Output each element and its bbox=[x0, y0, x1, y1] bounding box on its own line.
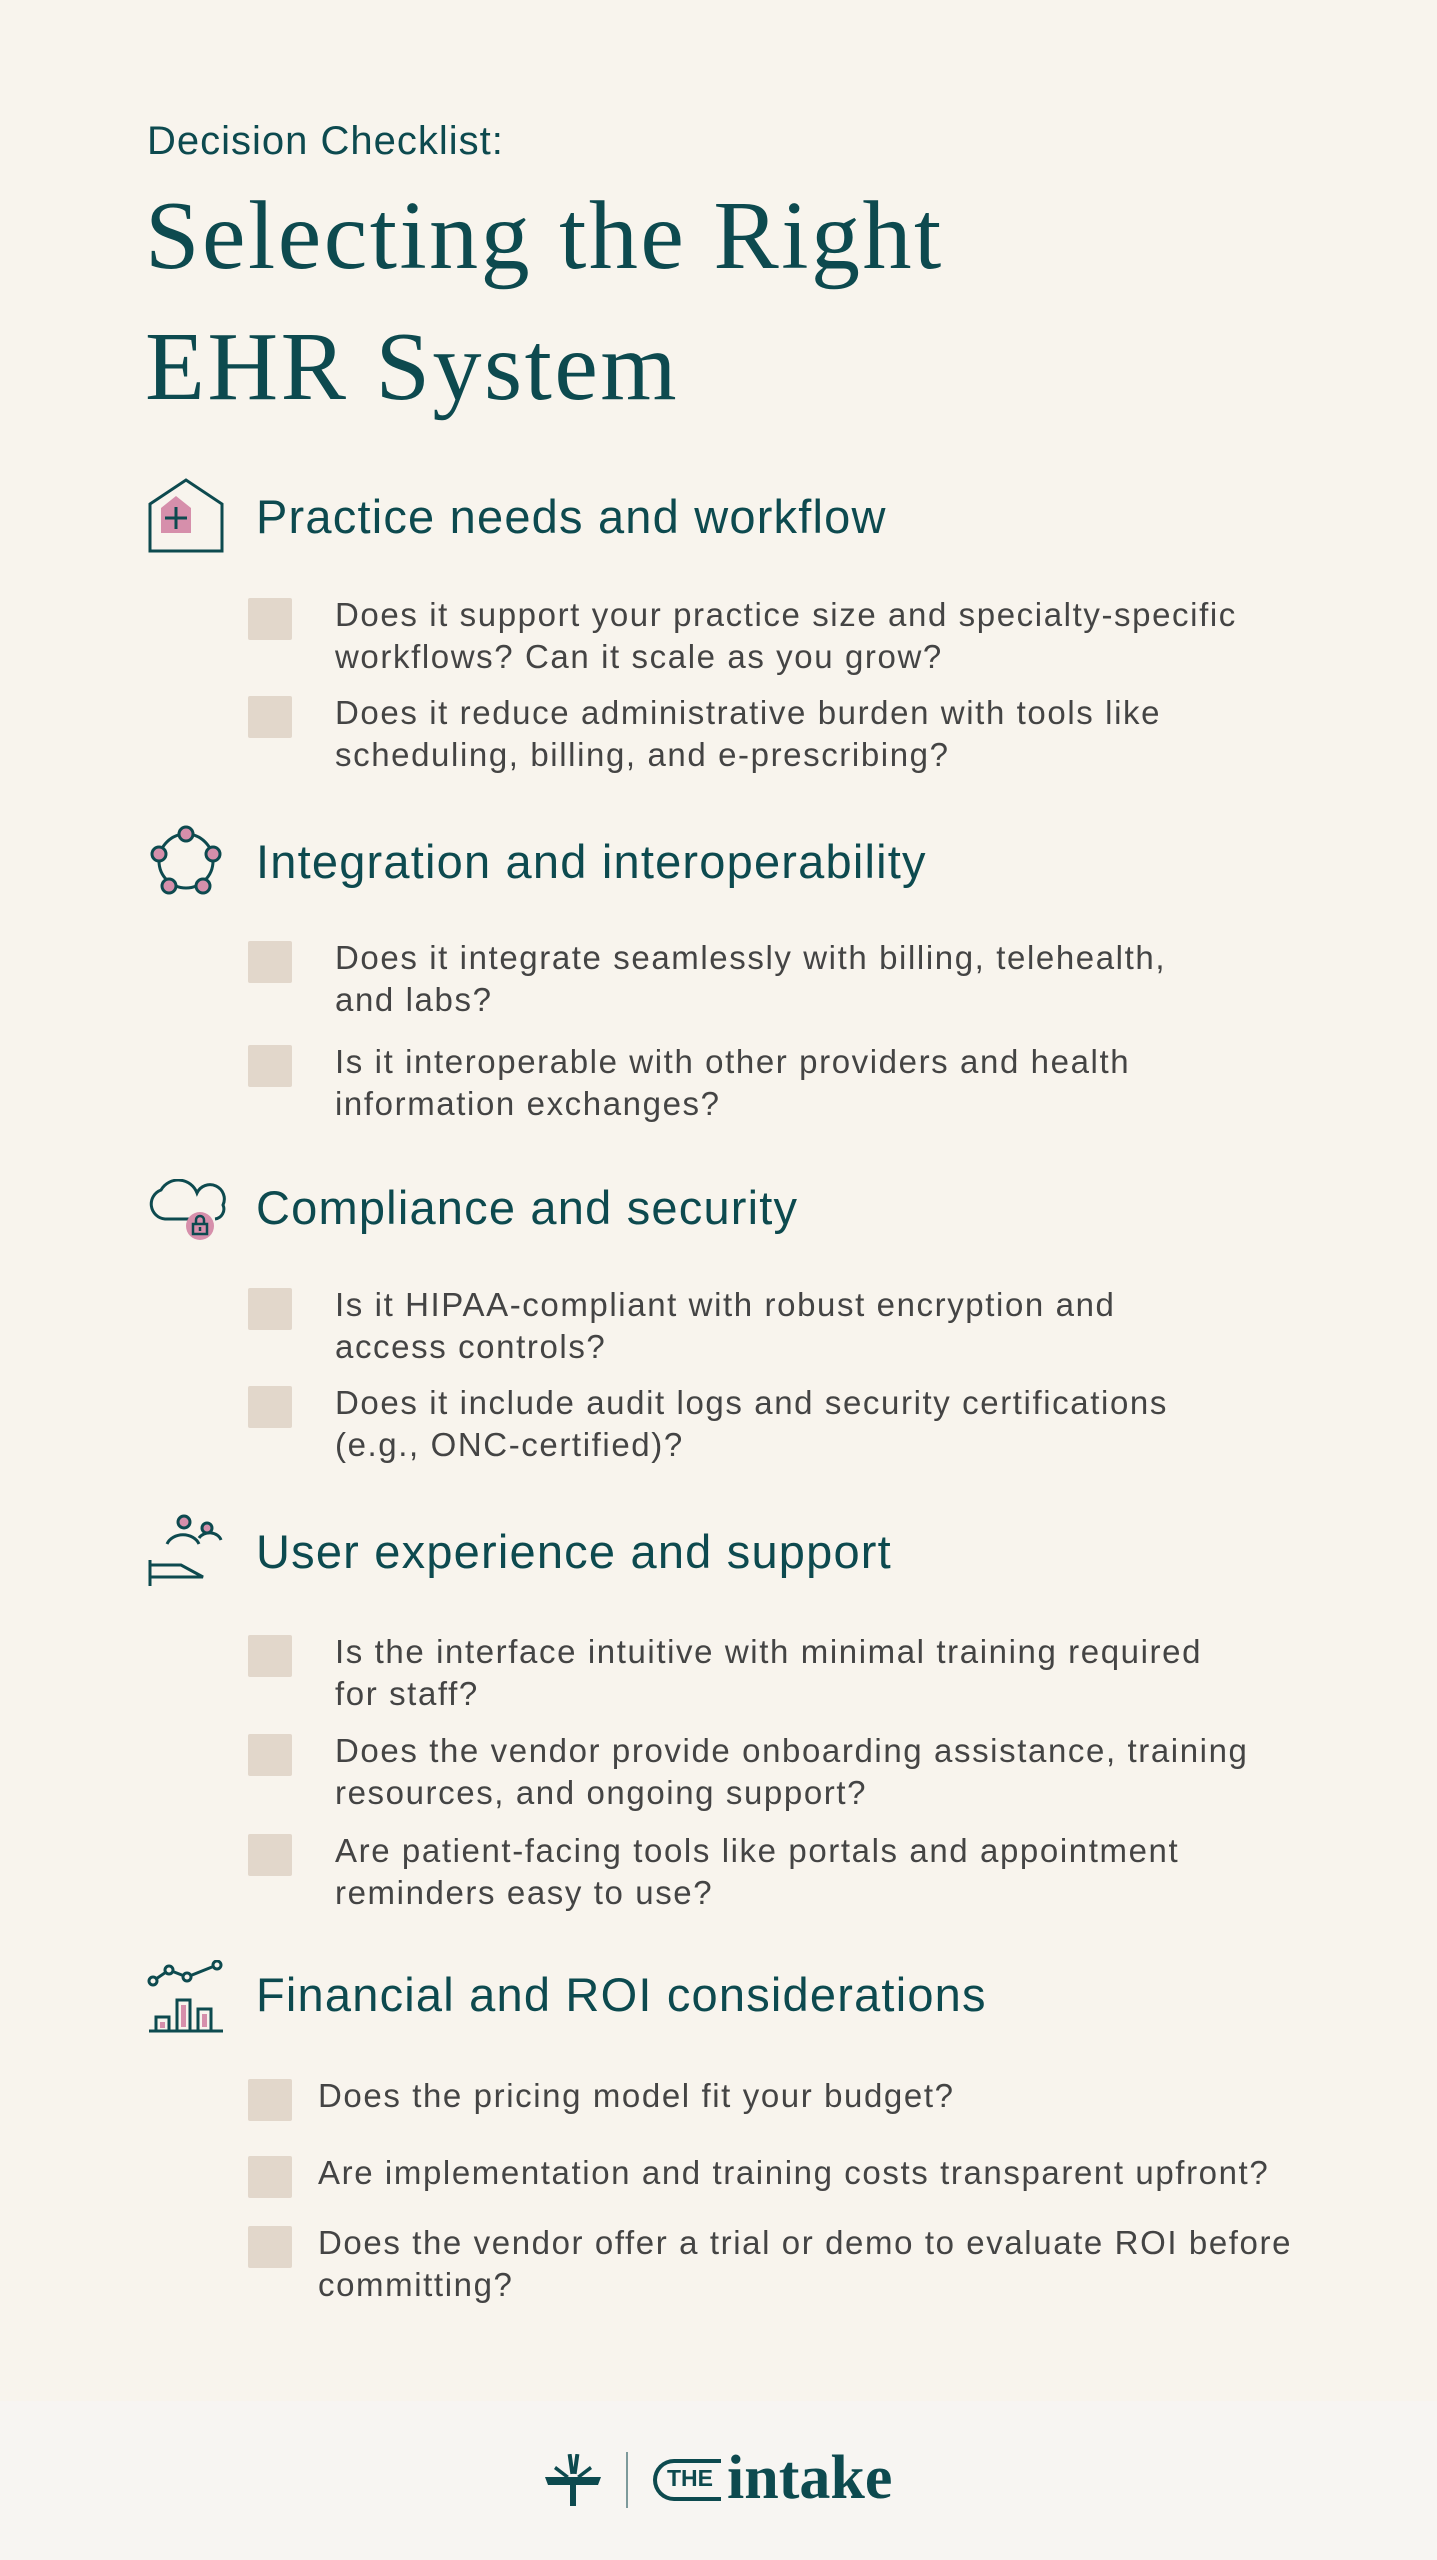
item: Does the vendor offer a trial or demo to evaluate ROI before bbox=[318, 2224, 1292, 2261]
checkbox bbox=[248, 598, 292, 640]
item: for staff? bbox=[335, 1675, 479, 1712]
item: Does it support your practice size and specialty-specific bbox=[335, 596, 1237, 633]
checkbox bbox=[248, 2226, 292, 2268]
checkbox bbox=[248, 1635, 292, 1677]
checkbox bbox=[248, 2156, 292, 2198]
item bbox=[335, 1633, 1202, 1712]
icon: network bbox=[150, 826, 222, 894]
subtitle: Decision Checklist: bbox=[147, 119, 504, 163]
item: Does it integrate seamlessly with billing, telehealth, bbox=[335, 939, 1166, 976]
item: scheduling, billing, and e-prescribing? bbox=[335, 736, 950, 773]
footer bbox=[0, 2401, 1437, 2560]
logo mark bbox=[545, 2454, 601, 2506]
item: Does the pricing model fit your budget? bbox=[318, 2077, 955, 2114]
checkbox bbox=[248, 1045, 292, 1087]
item: resources, and ongoing support? bbox=[335, 1774, 867, 1811]
icon: cloud lock bbox=[150, 1179, 226, 1240]
icon: users hand bbox=[148, 1514, 222, 1586]
item: workflows? Can it scale as you grow? bbox=[335, 638, 943, 675]
item bbox=[318, 2224, 1292, 2303]
item: Does the vendor provide onboarding assistance, training bbox=[335, 1732, 1249, 1769]
logo text bbox=[653, 2444, 892, 2512]
heading 2: Integration and interoperability bbox=[256, 835, 927, 888]
item bbox=[335, 939, 1166, 1018]
title: EHR System bbox=[145, 313, 679, 421]
icon: house bbox=[148, 478, 224, 552]
item: Is the interface intuitive with minimal training required bbox=[335, 1633, 1202, 1670]
heading 3: Compliance and security bbox=[256, 1181, 798, 1234]
checkbox bbox=[248, 1386, 292, 1428]
item: (e.g., ONC-certified)? bbox=[335, 1426, 684, 1463]
item bbox=[335, 596, 1237, 675]
item bbox=[335, 1732, 1249, 1811]
item bbox=[335, 1832, 1179, 1911]
item: access controls? bbox=[335, 1328, 606, 1365]
item: Is it HIPAA-compliant with robust encryption and bbox=[335, 1286, 1116, 1323]
item: Are patient-facing tools like portals and appointment bbox=[335, 1832, 1179, 1869]
icon: chart bbox=[148, 1960, 223, 2032]
item bbox=[335, 1286, 1116, 1365]
item: Is it interoperable with other providers and health bbox=[335, 1043, 1130, 1080]
heading 4: User experience and support bbox=[256, 1525, 892, 1578]
checkbox bbox=[248, 1288, 292, 1330]
checkbox bbox=[248, 696, 292, 738]
title bbox=[145, 182, 944, 421]
checkbox bbox=[248, 1834, 292, 1876]
item: Does it include audit logs and security certifications bbox=[335, 1384, 1168, 1421]
item bbox=[335, 1384, 1168, 1463]
title: Selecting the Right bbox=[145, 182, 944, 290]
checkbox bbox=[248, 2079, 292, 2121]
item: Are implementation and training costs transparent upfront? bbox=[318, 2154, 1269, 2191]
item bbox=[335, 694, 1161, 773]
divider bbox=[626, 2452, 628, 2508]
logo text: THE bbox=[667, 2465, 713, 2491]
heading 5: Financial and ROI considerations bbox=[256, 1968, 987, 2021]
item: Does it reduce administrative burden with tools like bbox=[335, 694, 1161, 731]
checkbox bbox=[248, 941, 292, 983]
checkbox bbox=[248, 1734, 292, 1776]
logo text: intake bbox=[727, 2444, 892, 2512]
item: and labs? bbox=[335, 981, 493, 1018]
item: information exchanges? bbox=[335, 1085, 721, 1122]
heading 1: Practice needs and workflow bbox=[256, 490, 887, 543]
item bbox=[335, 1043, 1130, 1122]
item: committing? bbox=[318, 2266, 514, 2303]
item: reminders easy to use? bbox=[335, 1874, 713, 1911]
